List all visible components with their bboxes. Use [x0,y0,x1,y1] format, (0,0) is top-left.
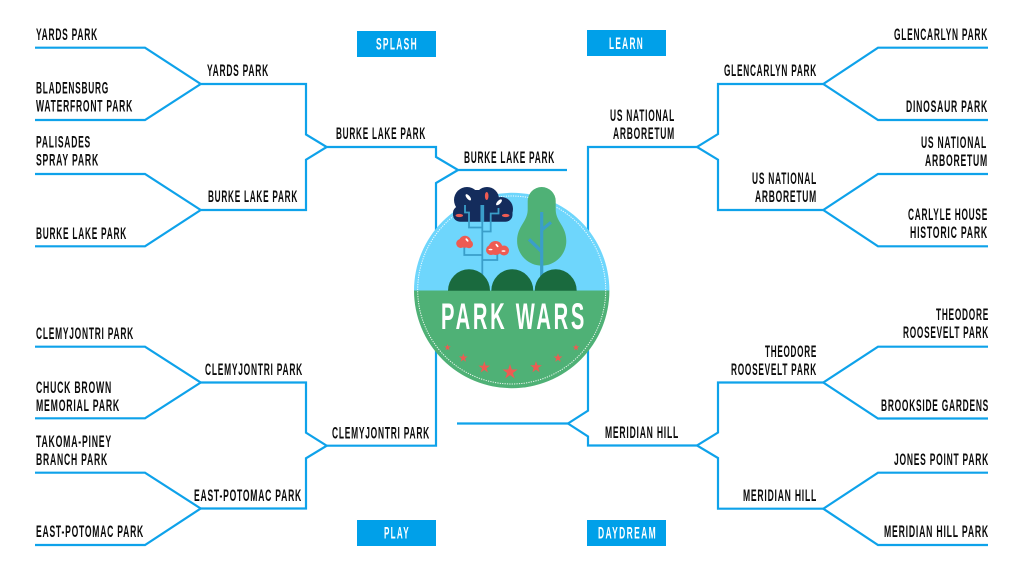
text: ROOSEVELT PARK [731,360,817,379]
round 3: US National Arboretum [610,106,675,143]
team: Takoma-Piney Branch Park: BRANCH PARK [36,450,108,469]
text: CLEMYJONTRI PARK [36,324,134,343]
badge ground [414,290,609,388]
text: YARDS PARK [207,61,269,80]
icon: green tree [517,187,566,290]
bracket lines: splash [35,48,567,250]
text: BURKE LAKE PARK [464,148,555,167]
team: Palisades Spray Park [36,132,99,170]
badge sky [414,193,609,290]
icon: dark tree with mushrooms [453,187,513,290]
category label: learn [587,30,666,56]
team: US National Arboretum [921,133,988,170]
category label: learn: LEARN [609,34,644,53]
text: CLEMYJONTRI PARK [332,424,430,442]
round 3: Meridian Hill: MERIDIAN HILL [605,423,679,442]
category label: splash: SPLASH [376,34,418,54]
text: GLENCARLYN PARK [724,61,817,80]
round 2: US National Arboretum [752,169,817,206]
category label: play [357,520,436,546]
bracket lines: daydream [457,340,988,545]
text: CLEMYJONTRI PARK [205,360,303,379]
category label: splash [357,31,436,57]
category label: daydream: DAYDREAM [598,524,657,542]
category label: daydream [587,520,666,546]
text: ARBORETUM [613,124,675,143]
team: Carlyle House Historic Park [908,205,988,242]
team: Chuck Brown Memorial Park: MEMORIAL PARK [36,396,120,415]
team: Palisades Spray Park: SPRAY PARK [36,150,99,170]
team: East-Potomac Park: EAST-POTOMAC PARK [36,522,144,541]
text: THEODORE [765,342,817,361]
team: Takoma-Piney Branch Park: TAKOMA-PINEY [36,432,112,451]
round 2: East-Potomac Park: EAST-POTOMAC PARK [194,486,302,505]
text: BURKE LAKE PARK [208,187,298,206]
team: Theodore Roosevelt Park [903,305,989,342]
bracket lines: play [35,340,436,545]
icon: hills [448,269,577,291]
team: Palisades Spray Park: PALISADES [36,132,91,152]
text: BURKE LAKE PARK [36,224,127,243]
text: BURKE LAKE PARK [336,124,426,143]
team: Bladensburg Waterfront Park: BLADENSBURG [36,78,109,98]
text: YARDS PARK [36,25,98,44]
stars [444,344,579,378]
team: Takoma-Piney Branch Park [36,432,112,469]
team: Chuck Brown Memorial Park: CHUCK BROWN [36,378,112,397]
text: US NATIONAL [752,169,817,188]
team: Bladensburg Waterfront Park [36,78,133,116]
round 2: Meridian Hill: MERIDIAN HILL [743,486,817,505]
team: Bladensburg Waterfront Park: WATERFRONT PARK [36,96,133,116]
text: US NATIONAL [610,106,675,125]
team: Chuck Brown Memorial Park [36,378,120,415]
bracket lines: learn [588,48,988,246]
round 2: Theodore Roosevelt Park [731,342,817,379]
text: ARBORETUM [755,187,817,206]
central badge: park wars [414,187,609,388]
badge title: PARK WARS [441,296,587,337]
category label: play: PLAY [384,524,410,542]
